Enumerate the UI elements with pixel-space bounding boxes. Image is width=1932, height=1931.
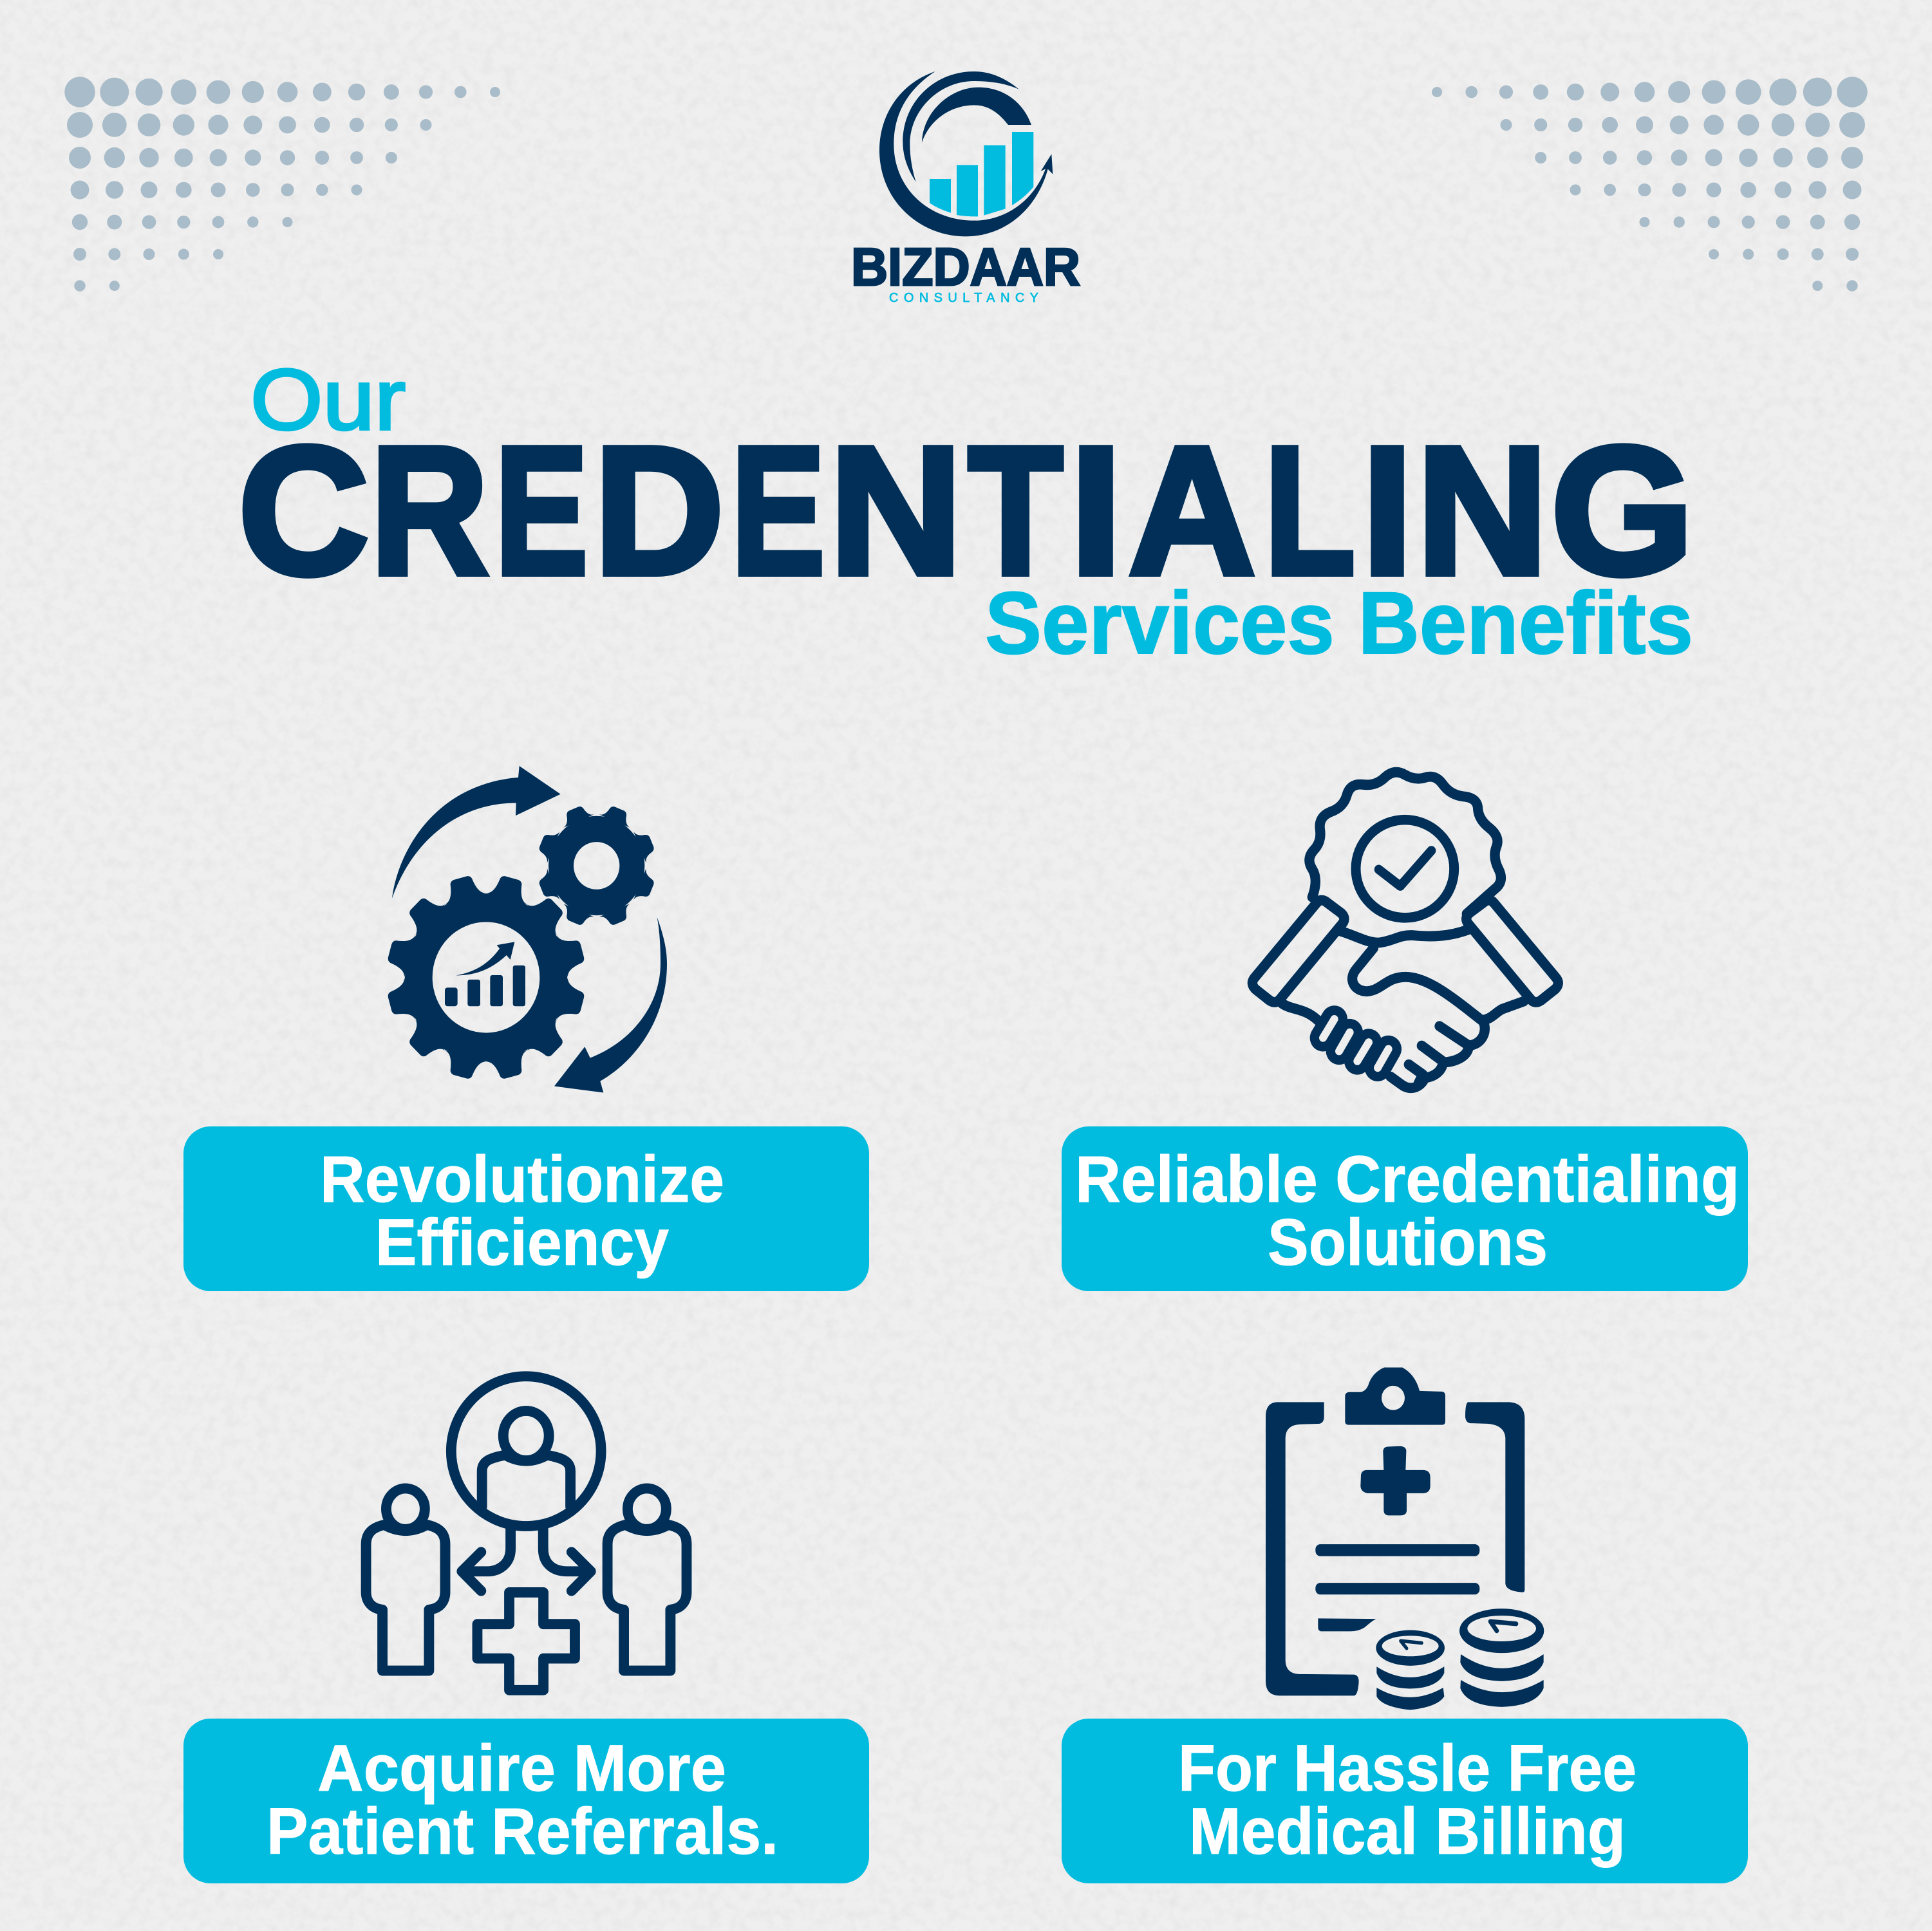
panel: Acquire More Patient Referrals <box>183 1719 869 1883</box>
medical cross <box>477 1592 575 1690</box>
title line: CREDENTIALING: I <box>1070 409 1122 612</box>
cuffs <box>1252 900 1344 1002</box>
right person <box>608 1488 687 1671</box>
title line: Our: Our <box>250 352 406 448</box>
large coin stack <box>1459 1609 1544 1707</box>
small coin stack <box>1376 1630 1445 1710</box>
large gear <box>384 872 588 1083</box>
logo mark: swoosh and bars <box>879 71 1053 236</box>
title line: CREDENTIALING: E <box>731 409 825 612</box>
clipboard frame <box>1266 1402 1524 1695</box>
left person <box>366 1488 445 1671</box>
title line: CREDENTIALING: R <box>371 409 488 612</box>
growth chart in gear <box>445 942 525 1006</box>
text lines <box>1315 1544 1479 1631</box>
title line: CREDENTIALING: T <box>968 409 1063 612</box>
title <box>238 352 1694 673</box>
title line: CREDENTIALING: L <box>1264 409 1355 612</box>
badge outline <box>1309 772 1501 914</box>
label line 2: Medical Billing <box>1189 1795 1626 1868</box>
fingers <box>1323 1019 1389 1068</box>
central circle <box>451 1376 601 1526</box>
label line 1: Revolutionize <box>320 1143 724 1216</box>
logo tagline: CONSULTANCY <box>889 291 1038 305</box>
small gear <box>535 802 658 929</box>
title line: CREDENTIALING: I <box>1362 409 1413 612</box>
title line: CREDENTIALING: G <box>1551 409 1694 612</box>
logo wordmark: BIZDAAR <box>851 237 1080 297</box>
title line: CREDENTIALING: E <box>495 409 588 612</box>
panel: For Hassle Free Medical Billing <box>1062 1719 1748 1883</box>
label line 1: Reliable Credentialing <box>1075 1143 1740 1216</box>
icon: gears and arrows <box>384 766 667 1093</box>
panel: Revolutionize Efficiency <box>183 1126 869 1291</box>
title line: CREDENTIALING: N <box>1416 409 1548 612</box>
title line: CREDENTIALING: C <box>238 409 369 612</box>
arrow: top curved <box>392 766 561 899</box>
title line: CREDENTIALING: N <box>829 409 962 612</box>
logo: Bizdaar Consultancy <box>851 71 1080 305</box>
title line: CREDENTIALING: D <box>594 409 724 612</box>
icon: clipboard with coins <box>1266 1368 1544 1710</box>
title line: CREDENTIALING: A <box>1129 409 1255 612</box>
label line 2: Patient Referrals. <box>267 1795 778 1868</box>
label line 2: Solutions <box>1268 1206 1548 1279</box>
panel: Reliable Credentialing Solutions <box>1062 1126 1748 1291</box>
label line 2: Efficiency <box>375 1206 669 1279</box>
check mark <box>1379 851 1431 886</box>
title line: Services Benefits: Services Benefits <box>985 574 1693 673</box>
label line 1: Acquire More <box>317 1731 726 1805</box>
label line 1: For Hassle Free <box>1178 1731 1637 1805</box>
referral arrows <box>462 1527 591 1591</box>
central person <box>503 1411 549 1460</box>
medical cross <box>1360 1446 1430 1515</box>
badge circle <box>1356 820 1454 918</box>
hand outlines <box>1282 929 1524 1088</box>
halftone dots: top left <box>64 77 500 292</box>
clip <box>1345 1368 1445 1425</box>
arrow: bottom curved <box>554 917 667 1093</box>
icon: handshake with badge <box>1252 772 1558 1088</box>
icon: patient referrals <box>366 1376 687 1690</box>
halftone dots: top right <box>1432 77 1868 292</box>
